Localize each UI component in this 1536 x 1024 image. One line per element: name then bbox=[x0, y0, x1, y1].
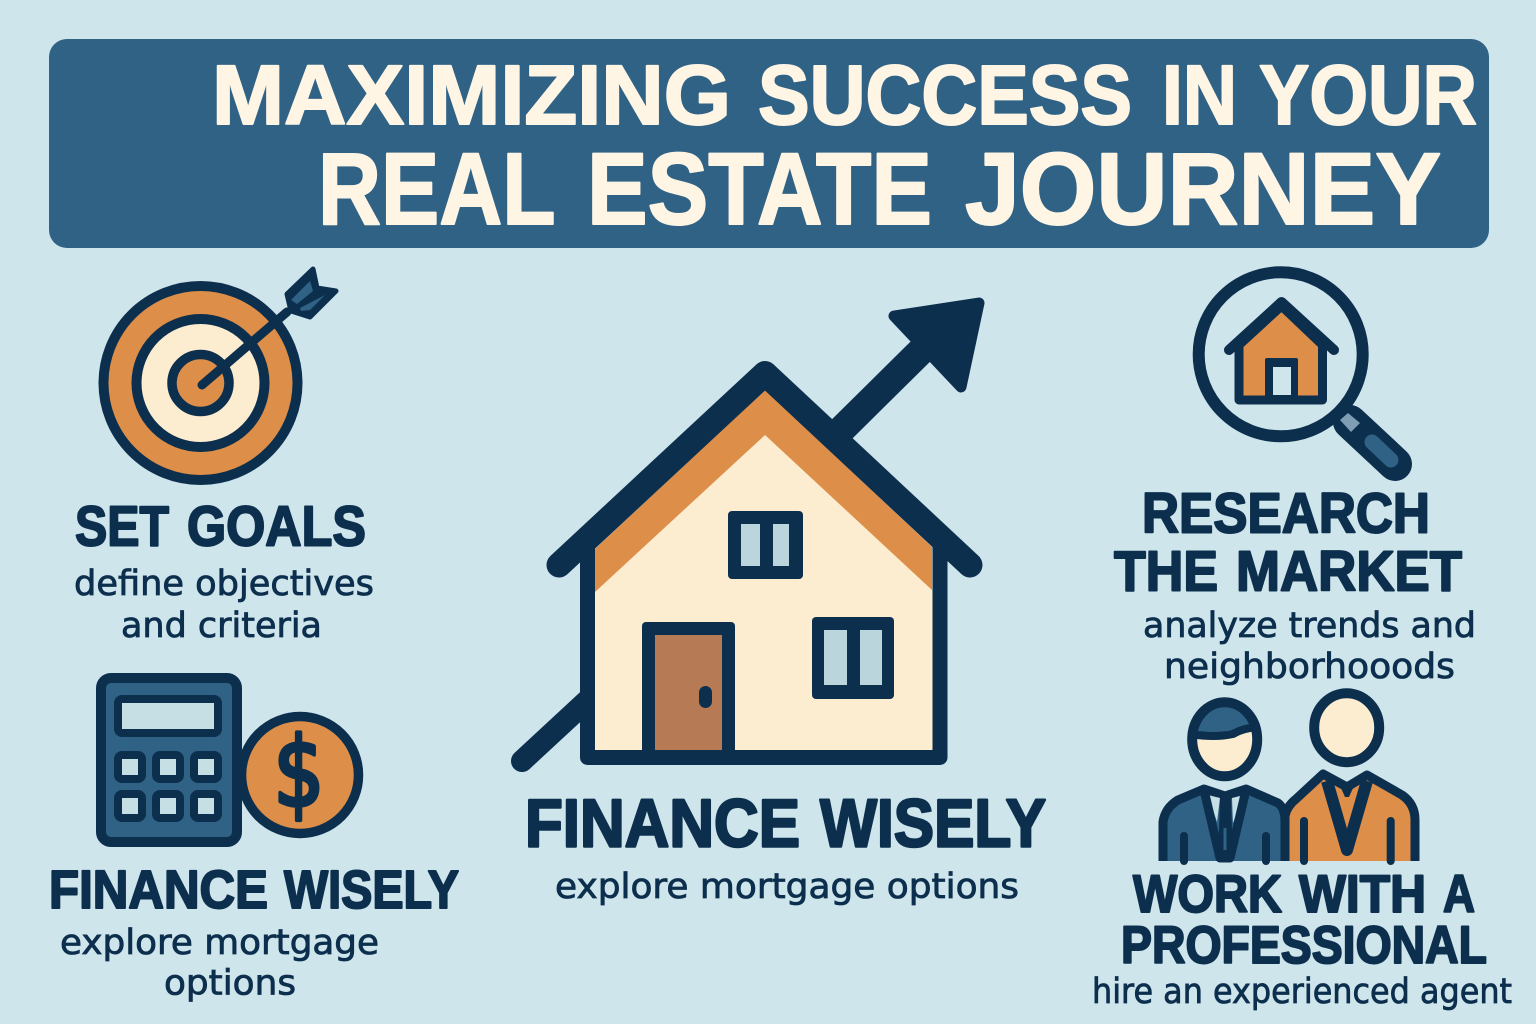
description: set goals: define objectives bbox=[74, 564, 374, 604]
upper window bbox=[728, 511, 803, 579]
heading: set goals: SET bbox=[75, 494, 169, 558]
title line 2: ESTATE bbox=[587, 132, 932, 246]
title banner bbox=[49, 39, 1489, 248]
description: set goals bbox=[74, 564, 374, 646]
panel: research the market bbox=[1114, 272, 1476, 687]
description: research the market: analyze trends and bbox=[1143, 606, 1476, 646]
panel: work with a professional bbox=[1092, 693, 1512, 1012]
panel: finance wisely left bbox=[49, 678, 459, 1004]
heading: work with a professional bbox=[1121, 865, 1487, 975]
icon: calculator bbox=[101, 678, 237, 842]
roof outline bbox=[559, 374, 970, 565]
icon: magnifying glass with house bbox=[1199, 272, 1395, 464]
heading: finance wisely left: FINANCE bbox=[49, 860, 268, 920]
description: research the market: neighborhooods bbox=[1164, 647, 1455, 687]
description: finance wisely left: options bbox=[164, 964, 296, 1004]
icon: dollar coin bbox=[242, 716, 358, 834]
lower window bbox=[812, 617, 894, 699]
description: finance wisely left: explore mortgage bbox=[60, 923, 379, 963]
icon: two professionals bbox=[1163, 693, 1415, 861]
heading: finance wisely center: WISELY bbox=[820, 786, 1046, 862]
icon: target with arrow bbox=[104, 269, 336, 480]
heading: work with a professional: WITH bbox=[1299, 865, 1426, 924]
heading: research the market bbox=[1114, 482, 1462, 604]
house body bbox=[587, 400, 940, 757]
heading: work with a professional: PROFESSIONAL bbox=[1121, 916, 1487, 975]
heading: finance wisely center: FINANCE bbox=[525, 786, 800, 862]
description: set goals: and criteria bbox=[121, 606, 322, 646]
title line 2: REAL bbox=[318, 132, 554, 246]
panel: set goals bbox=[74, 269, 374, 646]
person right bbox=[1285, 693, 1415, 861]
person left bbox=[1163, 695, 1285, 861]
description: finance wisely left bbox=[60, 923, 379, 1004]
description: research the market bbox=[1143, 606, 1476, 687]
heading: research the market: MARKET bbox=[1236, 540, 1462, 604]
heading: finance wisely left: WISELY bbox=[284, 860, 459, 920]
roof orange band bbox=[595, 390, 932, 592]
icon: dollar coin: $ bbox=[274, 717, 324, 829]
heading: work with a professional: WORK bbox=[1133, 865, 1282, 924]
title line 1: YOUR bbox=[1259, 48, 1477, 142]
door bbox=[642, 622, 735, 752]
title line 1: MAXIMIZING bbox=[212, 48, 731, 142]
title line 1: SUCCESS bbox=[758, 48, 1132, 142]
panel: center house bbox=[522, 303, 1046, 907]
arrow: lower shaft bbox=[522, 698, 590, 761]
heading: set goals: GOALS bbox=[187, 494, 366, 558]
house walls bbox=[588, 545, 940, 758]
description: finance wisely center: explore mortgage options bbox=[555, 867, 1019, 907]
heading: research the market: RESEARCH bbox=[1142, 482, 1430, 546]
title line 1: IN bbox=[1162, 48, 1237, 142]
icon: house with rising arrow bbox=[522, 303, 979, 761]
arrow: upper shaft and head bbox=[835, 303, 979, 436]
heading: work with a professional: A bbox=[1443, 865, 1475, 924]
heading: research the market: THE bbox=[1114, 540, 1218, 604]
title line 2: JOURNEY bbox=[965, 132, 1441, 246]
